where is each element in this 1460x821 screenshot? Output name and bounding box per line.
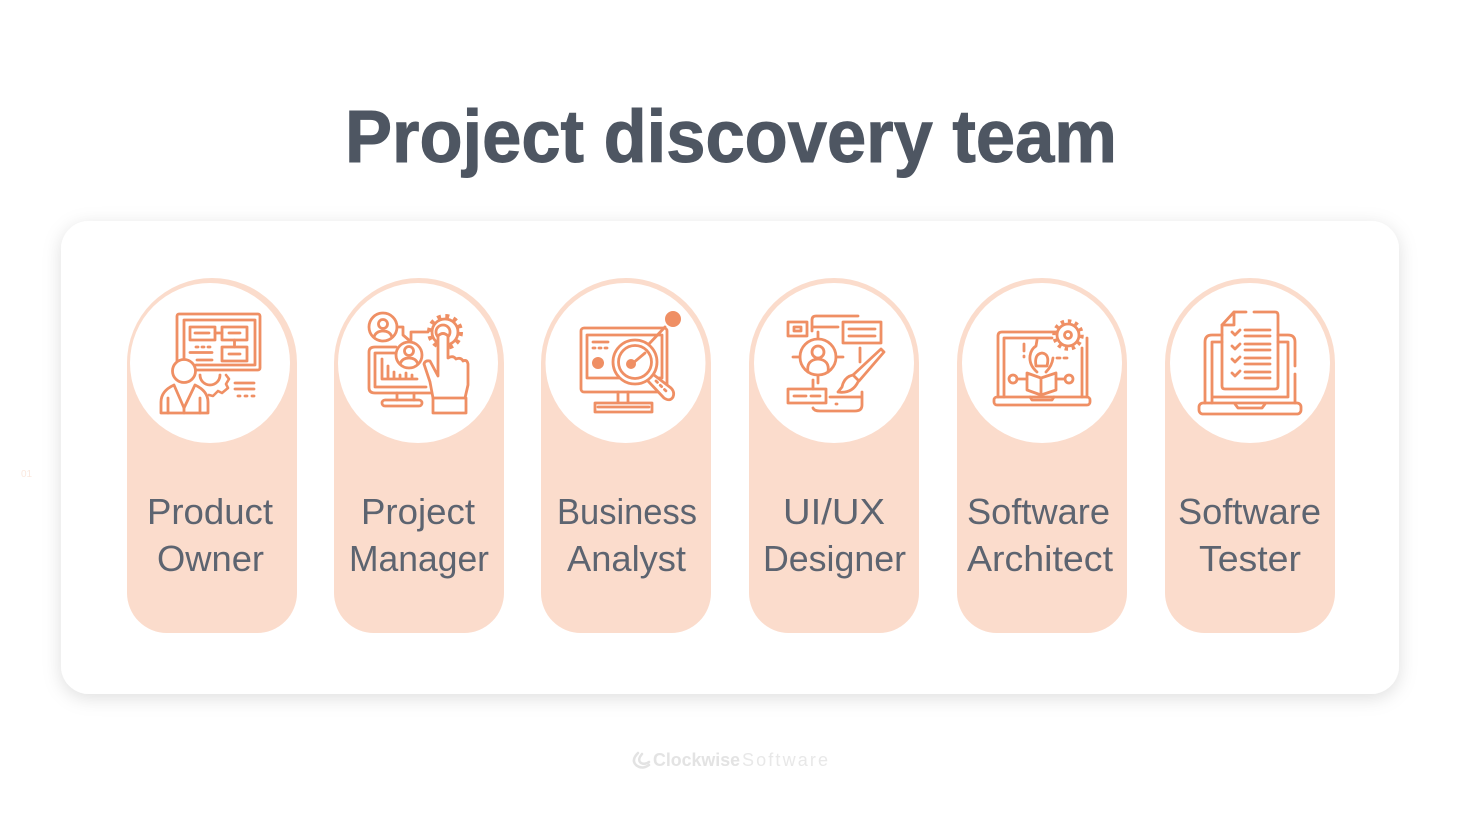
footer logo bbox=[634, 750, 828, 770]
footer logo: Clockwise bbox=[653, 750, 740, 770]
side marker: 01 bbox=[21, 469, 33, 480]
title: Project discovery team bbox=[345, 95, 1117, 178]
label: Business Analyst bbox=[557, 491, 697, 579]
card: Project Manager bbox=[334, 278, 504, 633]
label: Project Manager: Manager bbox=[349, 538, 489, 579]
label: UI/UX Designer: Designer bbox=[763, 538, 906, 579]
label: Business Analyst: Analyst bbox=[567, 538, 686, 579]
card: Product Owner bbox=[127, 278, 297, 633]
label: Software Tester: Tester bbox=[1199, 538, 1301, 579]
card: Software Architect bbox=[957, 278, 1127, 633]
icon: software tester bbox=[1199, 312, 1301, 414]
card: Business Analyst bbox=[541, 278, 711, 633]
icon: project manager bbox=[369, 313, 468, 413]
label: Product Owner bbox=[147, 491, 273, 579]
label: Project Manager: Project bbox=[361, 491, 475, 532]
icon: UI/UX designer bbox=[788, 316, 884, 411]
label: Product Owner: Owner bbox=[157, 538, 264, 579]
label: UI/UX Designer: UI/UX bbox=[783, 491, 885, 532]
icon: software architect bbox=[994, 321, 1090, 405]
label: UI/UX Designer bbox=[763, 491, 906, 579]
label: Project Manager bbox=[349, 491, 489, 579]
label: Product Owner: Product bbox=[147, 491, 273, 532]
card: Software Tester bbox=[1165, 278, 1335, 633]
label: Software Tester: Software bbox=[1178, 491, 1321, 532]
icon: product owner bbox=[161, 314, 260, 413]
label: Software Architect: Software bbox=[967, 491, 1110, 532]
label: Software Tester bbox=[1178, 491, 1321, 579]
label: Software Architect: Architect bbox=[967, 538, 1113, 579]
icon: business analyst bbox=[581, 311, 681, 412]
card: UI/UX Designer bbox=[749, 278, 919, 633]
panel: team bbox=[61, 221, 1399, 694]
label: Software Architect bbox=[967, 491, 1113, 579]
footer logo: Software bbox=[742, 750, 828, 770]
label: Business Analyst: Business bbox=[557, 491, 697, 532]
